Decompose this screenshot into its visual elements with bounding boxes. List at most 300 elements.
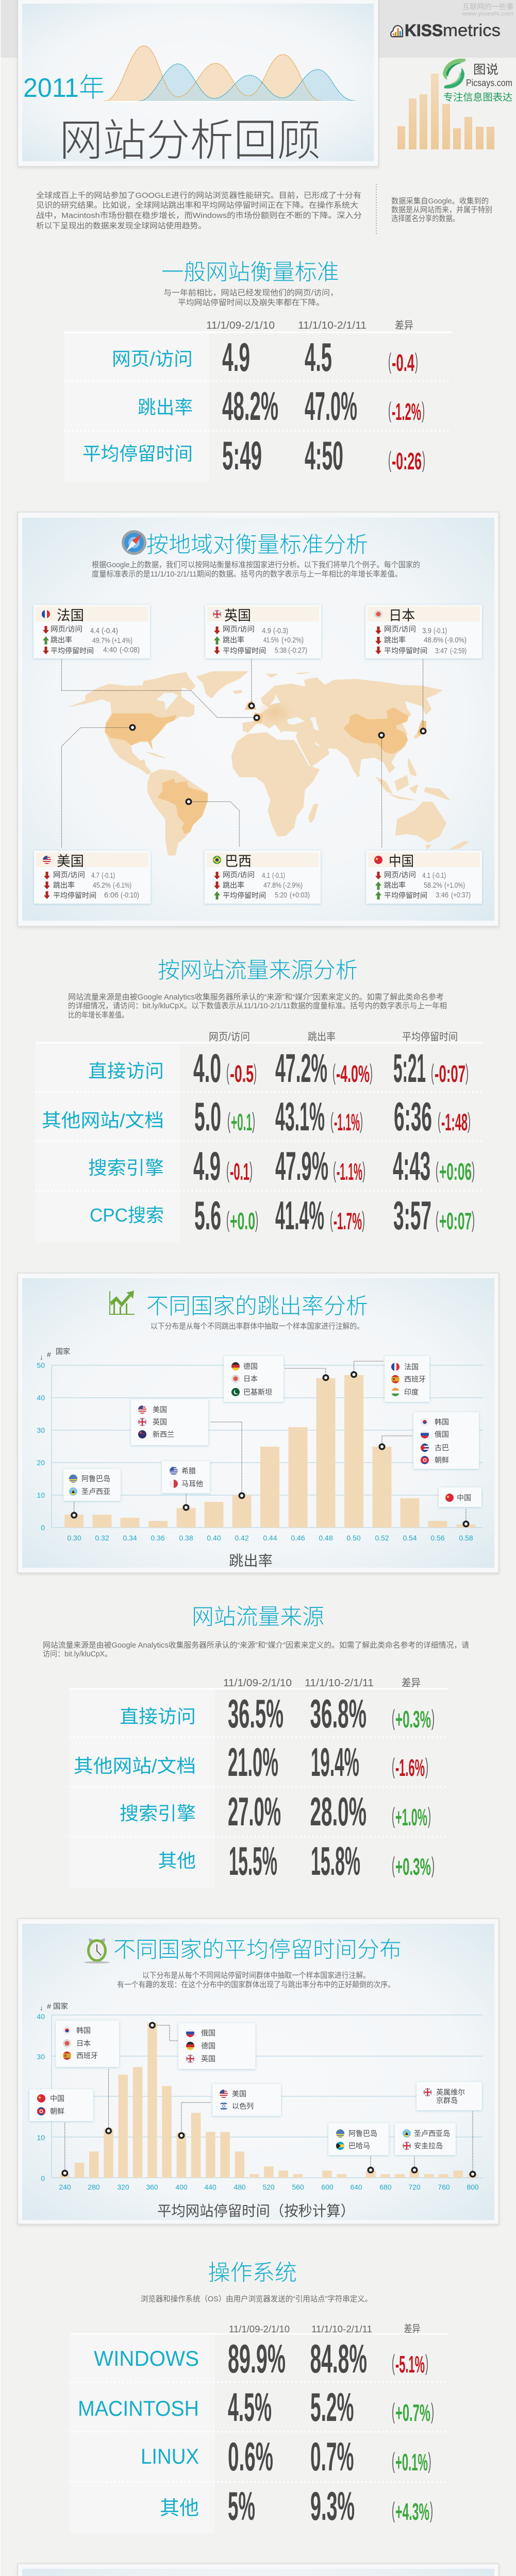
row: direct [120, 1691, 435, 1736]
card: France [34, 605, 150, 658]
card: China: 58.2% [424, 881, 442, 890]
row: other [158, 1838, 435, 1884]
row: referring sites: ) [252, 1108, 255, 1133]
leader lines [74, 1361, 466, 1522]
row: pages per visit: 4.9 [222, 334, 250, 380]
callout: Germany, Japan, Pakistan: 巴基斯坦 [243, 1388, 272, 1396]
x axis labels: 720 [408, 2183, 421, 2191]
row: Macintosh: 4.5% [228, 2384, 272, 2430]
card: France: 网页/访问 [51, 625, 82, 633]
section heading: operating systems: 操作系统 [208, 2261, 297, 2285]
row: average time on site: -0:26 [392, 448, 422, 474]
pins [61, 2022, 476, 2177]
x axis labels: 0.44 [263, 1534, 277, 1542]
callout: Korea, Japan, Spain: 日本 [76, 2039, 91, 2047]
section heading: time on site: 不同国家的平均停留时间分布 [113, 1938, 402, 1962]
table: operating systems: ) [428, 2448, 431, 2473]
row: referring sites: -1.1% [334, 1109, 360, 1136]
card: Brazil: (+0:03) [290, 891, 310, 900]
card: China: 3:46 [436, 891, 448, 900]
row: referring sites: -1:48 [441, 1109, 468, 1136]
x axis labels: 760 [438, 2183, 450, 2191]
x axis labels: 0.32 [95, 1534, 109, 1542]
x axis labels: 480 [234, 2183, 246, 2191]
row: Windows: WINDOWS [94, 2346, 199, 2370]
card: USA [34, 851, 151, 904]
axis label: # 国家 [47, 2002, 68, 2010]
row: direct: -4.0% [336, 1060, 370, 1087]
map leader lines [61, 659, 423, 848]
x axis labels: 280 [88, 2183, 100, 2191]
card: China: 网页/访问 [384, 871, 416, 879]
x axis labels: 600 [321, 2183, 334, 2191]
table: traffic sources: ) [428, 1803, 431, 1828]
text block: data note: 数据采集自Google。收集到的 [391, 197, 489, 206]
callout: Korea, Japan, Spain [56, 2021, 119, 2067]
row: direct: 直接访问 [120, 1706, 196, 1727]
callout: St Lucia, Anguilla: 安圭拉岛 [414, 2142, 443, 2150]
text block: time on site intro [117, 1971, 395, 1989]
x axis labels: 0.58 [459, 1534, 473, 1542]
callout: Aruba, St Lucia: 圣卢西亚 [81, 1487, 110, 1496]
card: Brazil: 跳出率 [223, 881, 244, 889]
callout: Russia, Germany, UK [178, 2023, 256, 2069]
card: UK: (+0.2%) [281, 636, 304, 645]
row: search engine: -0.1 [230, 1158, 249, 1185]
callout: Korea, Russia, Cuba, North Korea: 俄国 [435, 1430, 449, 1438]
callout: France, Spain, India [385, 1356, 429, 1402]
callout: Russia, Germany, UK: 俄国 [201, 2029, 215, 2037]
table: traffic sources: ) [425, 1754, 428, 1779]
callout: Germany, Japan, Pakistan: 德国 [243, 1362, 258, 1370]
card: Japan: (-2:59) [450, 647, 467, 655]
row: other: +0.3% [395, 1853, 431, 1880]
row: direct: -0:07 [435, 1060, 465, 1087]
card: Japan: 网页/访问 [384, 625, 416, 633]
row: Macintosh: +0.7% [395, 2399, 430, 2426]
table: operating systems: ) [431, 2399, 434, 2424]
row: direct: 直接访问 [88, 1060, 164, 1081]
callout: USA, UK, New Zealand: 美国 [153, 1405, 167, 1414]
axis label: ↓ [40, 1353, 43, 1361]
callout: Aruba, Bahamas [328, 2123, 389, 2155]
seas cut out of land [156, 693, 321, 746]
row: search engine: ) [249, 1158, 253, 1183]
logo: KISSmetrics header: KISS [405, 21, 443, 40]
row: direct: ( [332, 1060, 336, 1085]
card: USA: (-6.1%) [113, 881, 131, 890]
row: other: +4.3% [395, 2498, 429, 2525]
row: other: ( [392, 2498, 395, 2523]
x axis labels: 360 [146, 2183, 158, 2191]
card: Japan: 跳出率 [384, 636, 406, 644]
card: USA: 网页/访问 [53, 871, 85, 879]
table: traffic source analysis: ) [468, 1108, 471, 1133]
callout: British Virgin Islands [417, 2082, 482, 2110]
row: search engine: 搜索引擎 [88, 1157, 164, 1178]
text block: introduction [36, 191, 362, 230]
card: Japan: 3:47 [435, 647, 447, 655]
callout: China, North Korea: 中国 [50, 2094, 64, 2103]
callout: Korea, Japan, Spain: 韩国 [76, 2026, 91, 2035]
row: referring sites: +0.1 [231, 1109, 252, 1136]
card: USA: 美国 [57, 854, 84, 869]
text block: time on site intro: 以下分布是从每个不同网站停留时间群体中抽取一个样本国家进行注解。 [142, 1971, 370, 1980]
row: bounce rate [138, 383, 425, 429]
row: average time on site: 5:49 [222, 433, 262, 478]
table: traffic sources: 11/1/10-2/1/11 [305, 1677, 374, 1689]
row: search engine: 28.0% [310, 1789, 367, 1834]
main title: 网站分析回顾 [59, 116, 321, 165]
icon: growth chart [109, 1291, 135, 1315]
x axis labels: 0.34 [123, 1534, 137, 1542]
card: China: (-0.1) [432, 871, 446, 880]
card: Brazil: 平均停留时间 [223, 891, 266, 900]
card: USA: 6:06 [104, 891, 119, 900]
row: search engine [88, 1143, 475, 1189]
bars [60, 2023, 477, 2178]
callout: Aruba, Bahamas: 巴哈马 [348, 2142, 370, 2150]
callout: St Lucia, Anguilla [395, 2123, 456, 2155]
callout: China: 中国 [457, 1494, 471, 1502]
row: Linux: LINUX [141, 2444, 199, 2468]
y axis labels: 30 [37, 1426, 45, 1434]
world map [70, 671, 469, 855]
text block: introduction: 析以下呈现出的数据来发现全球网站使用趋势。 [36, 221, 206, 230]
x axis labels: 240 [59, 2183, 71, 2191]
table: operating systems: ) [425, 2350, 428, 2376]
card: Japan: 日本 [389, 608, 415, 623]
x axis labels: 0.30 [67, 1534, 81, 1542]
row: search engine [120, 1789, 431, 1834]
text block: traffic source intro: 的详细情况，请访问：bit.ly/kluCpX。以下数值表示从11/1/10-2/1/11数据的度量标准。括号内的数字表示与上一年相 [68, 1002, 447, 1010]
card: Japan: 48.6% [424, 636, 443, 645]
row: referring sites: ( [330, 1108, 334, 1133]
card: Japan: 3.9 [422, 626, 431, 635]
card: China: 中国 [389, 854, 414, 869]
card: UK: 41.5% [263, 636, 279, 645]
callout: Greece, Malta: 希腊 [181, 1467, 196, 1475]
table: general metrics: 11/1/09-2/1/10 [206, 320, 275, 331]
callout: USA, Israel: 美国 [232, 2090, 246, 2098]
card: UK [205, 605, 321, 658]
table: operating systems: ) [430, 2498, 433, 2523]
row: direct: ) [254, 1060, 257, 1085]
card: UK: 英国 [224, 608, 251, 623]
y axis labels [37, 1361, 45, 1532]
text block: operating systems intro: 浏览器和操作系统（OS）由用户浏览器发送的“引用站点”字符串定义。 [141, 2295, 372, 2303]
callout: USA, UK, New Zealand: 新西兰 [153, 1430, 174, 1438]
x axis labels: 0.52 [375, 1534, 389, 1542]
section heading: traffic sources: 网站流量来源 [192, 1605, 324, 1630]
row: Macintosh [78, 2384, 434, 2430]
panel: goal conversion by country [18, 2564, 499, 2576]
card: UK: (-0.3) [273, 626, 288, 635]
table: operating systems [70, 2323, 448, 2533]
card: France: 平均停留时间 [51, 647, 94, 655]
callout: Korea, Russia, Cuba, North Korea: 朝鲜 [435, 1456, 449, 1464]
row: direct: +0.3% [395, 1706, 431, 1733]
card: Japan: (-0.1) [434, 626, 447, 635]
text block: data note: 数据是从网站而来，并属于特别 [391, 206, 492, 214]
row: referring sites: ) [360, 1108, 363, 1133]
row: Macintosh: MACINTOSH [78, 2396, 199, 2420]
row: referring sites: 5.0 [194, 1094, 221, 1139]
icon: alarm clock [84, 1938, 110, 1963]
callout: China, North Korea [29, 2089, 93, 2121]
card: Brazil: 网页/访问 [223, 871, 255, 879]
row: search engine: 搜索引擎 [120, 1803, 196, 1824]
x axis labels: 0.42 [235, 1534, 249, 1542]
card: USA: (-0:10) [121, 891, 139, 900]
x axis labels: 0.40 [207, 1534, 221, 1542]
row: direct: ) [370, 1060, 373, 1085]
row: CPC search: 41.4% [275, 1193, 324, 1238]
callout: Russia, Germany, UK: 德国 [201, 2042, 215, 2050]
row: direct: 47.2% [275, 1045, 327, 1091]
panel: bounce rate by country [18, 1273, 499, 1573]
row: Windows [94, 2336, 428, 2381]
table: operating systems: 差异 [404, 2323, 421, 2335]
chart: overlapping dotted curves [105, 46, 356, 101]
row: direct: ( [392, 1705, 395, 1731]
card: USA: (-0.1) [102, 871, 115, 880]
axis label: ↓ [40, 2004, 43, 2012]
card: UK: 跳出率 [223, 636, 244, 644]
row: search engine: 4:43 [393, 1143, 430, 1189]
row: pages per visit: ( [388, 349, 391, 374]
chart: average time on site distribution [29, 2002, 483, 2219]
callout: Greece, Malta: 马耳他 [181, 1480, 203, 1488]
card: USA: 跳出率 [53, 881, 75, 889]
text block: general metrics intro [163, 289, 338, 307]
card: Brazil: 5:20 [275, 891, 287, 900]
card: UK: (-0:27) [288, 646, 307, 655]
row: CPC search: ) [362, 1207, 365, 1232]
callout: USA, Israel [212, 2084, 281, 2116]
row: bounce rate: 47.0% [305, 383, 357, 429]
axis label [40, 2002, 68, 2012]
card: China: 平均停留时间 [384, 891, 427, 900]
row: direct: ( [431, 1060, 434, 1085]
card: UK: 平均停留时间 [223, 647, 266, 655]
card: China: 4.1 [422, 871, 430, 880]
row: average time on site: ( [388, 447, 391, 472]
row: bounce rate: 跳出率 [138, 397, 193, 418]
callout: USA, UK, New Zealand: 英国 [153, 1418, 167, 1426]
text block: geography intro: 根据Google上的数据，我们可以按网站衡量标准按国家进行分析。以下我们将举几个例子。每个国家的 [92, 561, 420, 569]
row: direct: 36.8% [310, 1691, 367, 1736]
row: Linux: 0.7% [310, 2434, 354, 2479]
callout: St Lucia, Anguilla: 圣卢西亚岛 [414, 2129, 450, 2138]
text block: traffic source intro: 网站流量来源是由被Google Analytics收集服务器所承认的“来源”和“媒介”因素来定义的。如需了解此类命名参考 [68, 992, 444, 1002]
card: France: (-0:08) [120, 646, 140, 654]
logo: Picsays header: 图说 [473, 63, 498, 77]
table: traffic source analysis: 平均停留时间 [402, 1031, 458, 1043]
table: general metrics: 11/1/10-2/1/11 [298, 320, 367, 331]
text block: traffic sources intro: 网站流量来源是由被Google Analytics收集服务器所承认的“来源”和“媒介”因素来定义的。如需了解此类命名参考的详细情况，请 [43, 1640, 469, 1650]
card: Brazil: 巴西 [225, 854, 252, 869]
section heading: general metrics: 一般网站衡量标准 [161, 260, 339, 285]
row: direct: -0.5 [230, 1060, 254, 1087]
row: bounce rate: ( [388, 398, 391, 423]
icon: compass [122, 530, 146, 555]
row: search engine: +0:06 [439, 1158, 472, 1185]
row: direct: 5:21 [393, 1045, 426, 1091]
row: other: 5% [228, 2483, 255, 2529]
callout: British Virgin Islands: 英属维尔 [436, 2088, 465, 2096]
x axis labels: 0.56 [430, 1534, 445, 1542]
table: operating systems: 11/1/09-2/1/10 [229, 2324, 290, 2334]
row: pages per visit: -0.4 [392, 349, 414, 376]
row: search engine: ( [436, 1158, 439, 1183]
row: search engine: 4.9 [193, 1143, 221, 1189]
row: average time on site [82, 433, 425, 478]
x axis labels: 640 [350, 2183, 362, 2191]
row: CPC search: CPC搜索 [90, 1205, 164, 1226]
row: referring sites: 21.0% [228, 1739, 278, 1785]
x axis labels [59, 2183, 479, 2191]
card: Brazil: (-0.1) [272, 871, 285, 880]
table: traffic source analysis: ) [472, 1158, 475, 1183]
row: CPC search: 5.6 [194, 1193, 221, 1238]
y axis labels: 30 [37, 2053, 45, 2061]
card: China: 跳出率 [384, 881, 406, 889]
callout: Aruba, Bahamas: 阿鲁巴岛 [348, 2129, 377, 2138]
text block: introduction: 全球成百上千的网站参加了GOOGLE进行的网站浏览器性能研究。目前，已形成了十分有 [36, 191, 361, 200]
text block: traffic source intro: 比的年增长率差值。 [68, 1011, 128, 1020]
x axis title: 跳出率 [229, 1553, 273, 1569]
row: CPC search: ( [226, 1207, 229, 1232]
callout: Korea, Russia, Cuba, North Korea: 韩国 [435, 1418, 449, 1426]
card: Japan: (-9.0%) [445, 636, 467, 645]
y axis labels: 50 [37, 1361, 45, 1369]
text block: time on site intro: 有一个有趣的发现：在这个分布中的国家群体出现了与跳出率分布中的正好颠倒的次序。 [117, 1980, 395, 1989]
table: general metrics: ) [422, 398, 425, 423]
row: referring sites: 43.1% [275, 1094, 325, 1139]
row: search engine: -1.1% [337, 1158, 362, 1185]
row: referring sites: ( [438, 1108, 441, 1133]
table: traffic sources [70, 1677, 448, 1888]
axis label: # [47, 1350, 51, 1359]
table: general metrics: 差异 [395, 319, 413, 331]
callout: British Virgin Islands: 京群岛 [436, 2096, 458, 2105]
card: France: 法国 [57, 608, 84, 623]
callout: Greece, Malta [162, 1461, 210, 1493]
row: search engine: +1.0% [395, 1804, 427, 1831]
row: referring sites: 19.4% [311, 1739, 359, 1785]
row: average time on site: 平均停留时间 [82, 443, 193, 464]
x axis labels: 0.54 [403, 1534, 417, 1542]
callout: France, Spain, India: 印度 [404, 1388, 419, 1396]
text block: traffic sources intro: 访问：bit.ly/kluCpX。 [43, 1650, 112, 1658]
card: France: (+1.4%) [112, 636, 132, 645]
row: direct: 4.0 [193, 1045, 221, 1091]
row: other: 其他 [158, 1850, 196, 1871]
section heading: bounce rate: 不同国家的跳出率分析 [146, 1294, 368, 1319]
row: search engine: ( [333, 1158, 336, 1183]
card: Brazil: 4.1 [262, 871, 270, 880]
row: CPC search: -1.7% [334, 1208, 362, 1234]
section heading: geography: 按地域对衡量标准分析 [146, 533, 368, 557]
row: direct [88, 1045, 469, 1091]
section heading: traffic source analysis: 按网站流量来源分析 [158, 958, 358, 983]
row: bounce rate: 48.2% [222, 383, 278, 429]
table: traffic source analysis: ) [472, 1207, 475, 1232]
logo: KISSmetrics header [391, 21, 501, 40]
card: France: (-0.4) [102, 626, 118, 635]
table: traffic source analysis: 网页/访问 [209, 1031, 250, 1043]
row: CPC search: ) [255, 1207, 258, 1232]
table: traffic source analysis: ) [465, 1060, 469, 1085]
text block: geography intro [92, 561, 420, 579]
map pins [129, 703, 427, 805]
card: France: 4.4 [90, 626, 99, 635]
row: Macintosh: 5.2% [310, 2384, 354, 2430]
card: USA: 45.2% [93, 881, 111, 890]
table: operating systems: 11/1/10-2/1/11 [311, 2324, 372, 2334]
x axis labels: 0.50 [346, 1534, 361, 1542]
row: Windows: ( [392, 2350, 395, 2376]
table: general metrics [64, 319, 452, 482]
row: referring sites: ( [227, 1108, 230, 1133]
row: direct: ( [226, 1060, 229, 1085]
x axis labels: 400 [175, 2183, 188, 2191]
table: general metrics: ) [422, 447, 425, 472]
table: traffic source analysis: 跳出率 [308, 1031, 336, 1043]
bars [64, 1375, 475, 1528]
row: Windows: 84.8% [310, 2336, 367, 2381]
text block: data note [391, 197, 492, 223]
row: CPC search: +0:07 [439, 1208, 472, 1234]
table: traffic sources: 11/1/09-2/1/10 [223, 1677, 292, 1689]
table: traffic sources: ) [431, 1705, 435, 1731]
row: pages per visit [112, 334, 418, 380]
callout: China, North Korea: 朝鲜 [50, 2107, 64, 2115]
card: Japan [365, 605, 482, 658]
text block: introduction: 见识的研究结果。比如说，全球网站跳出率和平均网站停留时间正在下降。在操作系统大 [36, 200, 358, 210]
watermark text: 互联网的一些事 [462, 3, 513, 11]
chart: bounce rate distribution [37, 1347, 483, 1569]
leader lines [65, 2025, 473, 2171]
card: China [366, 851, 482, 904]
y axis labels [37, 2012, 45, 2182]
text block: general metrics intro: 平均网站停留时间以及崩失率都在下降。 [178, 298, 324, 307]
card: Brazil [205, 851, 321, 904]
row: referring sites: -1.6% [395, 1754, 425, 1781]
text block: traffic sources intro [43, 1640, 469, 1658]
x axis labels [67, 1534, 473, 1542]
x axis labels: 440 [204, 2183, 217, 2191]
table: general metrics: ) [415, 349, 418, 374]
row: pages per visit: 4.5 [305, 334, 332, 380]
row: referring sites: ( [392, 1754, 395, 1779]
x axis labels: 800 [467, 2183, 479, 2191]
callout: USA, Israel: 以色列 [232, 2102, 254, 2110]
panel: metrics by geography [18, 512, 499, 926]
card: UK: 网页/访问 [223, 625, 255, 633]
row: referring sites [74, 1739, 428, 1785]
pins [71, 1371, 469, 1527]
row: referring sites: 其他网站/文档 [42, 1110, 164, 1131]
callout: Germany, Japan, Pakistan [224, 1356, 284, 1402]
x axis labels: 520 [262, 2183, 275, 2191]
row: other [160, 2483, 433, 2529]
row: other: 其他 [160, 2498, 199, 2519]
x axis labels: 0.38 [179, 1534, 193, 1542]
text block: bounce rate intro: 以下分布是从每个不同跳出率群体中抽取一个样本国家进行注解的。 [151, 1322, 364, 1331]
panel: hero header [18, 0, 378, 166]
